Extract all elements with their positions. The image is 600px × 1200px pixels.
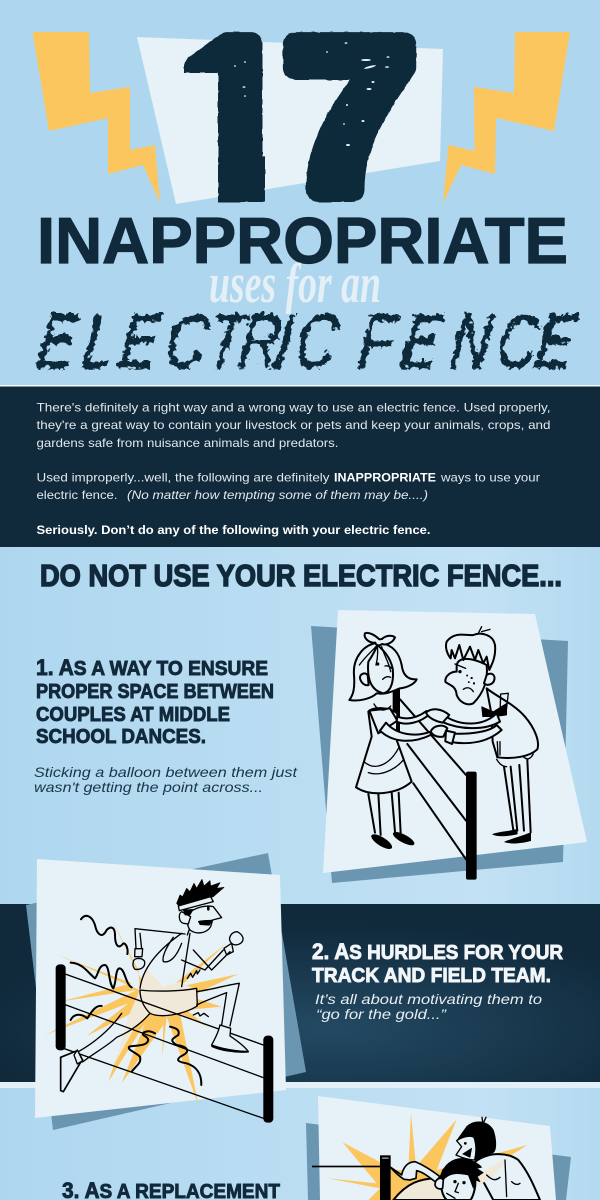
runner torso and shorts <box>140 933 230 988</box>
item 1 caption <box>34 764 298 795</box>
panel card <box>318 1096 556 1200</box>
title number 17: 1 <box>181 0 287 235</box>
intro paragraph one: they're a great way to contain your livestock or pets and keep your animals, crops, and <box>36 418 550 432</box>
posts <box>56 964 66 1050</box>
item 2 illustration panel <box>26 853 306 1130</box>
item 1 heading: COUPLES AT MIDDLE <box>36 703 230 726</box>
item 2 heading <box>312 939 563 987</box>
item 1 text <box>34 655 298 795</box>
cream highlight <box>115 968 197 1063</box>
item 1 heading: PROPER SPACE BETWEEN <box>36 680 274 703</box>
header: title artwork <box>32 32 580 370</box>
item 1 heading: SCHOOL DANCES. <box>36 725 206 748</box>
intro paragraph two: INAPPROPRIATE <box>334 470 436 484</box>
post <box>380 1155 391 1200</box>
intro paragraph two: (No matter how tempting some of them may be....) <box>127 488 428 502</box>
item 2 caption: It’s all about motivating them to <box>315 991 542 1007</box>
illustration: couple kept apart by fence <box>349 627 538 880</box>
icon: left lightning bolt <box>32 32 160 203</box>
intro paragraph one <box>36 400 550 450</box>
boy <box>426 627 538 843</box>
panel shadow <box>26 853 306 1130</box>
white backing panel <box>137 37 443 204</box>
intro warning: Seriously. Don’t do any of the following with your electric fence. <box>36 523 430 537</box>
back figure <box>456 1117 540 1200</box>
title script: uses for an: uses for an <box>209 253 381 315</box>
icon: right lightning bolt <box>443 32 570 203</box>
title word: inappropriate: INAPPROPRIATE <box>37 204 568 277</box>
boy arms <box>442 713 500 728</box>
intro band <box>0 385 600 547</box>
shock squiggles <box>81 916 128 954</box>
intro paragraph two <box>36 470 540 502</box>
intro paragraph two: electric fence. <box>36 488 118 502</box>
intro paragraph one: gardens safe from nuisance animals and predators. <box>36 436 338 450</box>
item 2 caption <box>315 991 542 1022</box>
fence post <box>466 772 477 880</box>
panel shadow <box>311 626 568 883</box>
wires <box>63 973 263 1118</box>
panel card <box>35 859 286 1118</box>
intro paragraph two: ways to use your <box>440 470 540 484</box>
title number 17 <box>184 32 417 202</box>
item 1 caption: wasn't getting the point across... <box>34 779 263 795</box>
panel shadow <box>306 1123 571 1200</box>
electric starburst <box>328 1113 527 1200</box>
runner head <box>187 906 222 933</box>
front man <box>391 1158 483 1200</box>
intro paragraph two: Used improperly...well, the following are definitely <box>36 470 330 484</box>
item 2 heading: 2. AS HURDLES FOR YOUR <box>312 939 563 964</box>
runner back arm <box>135 929 185 957</box>
item 1 caption: Sticking a balloon between them just <box>34 764 298 780</box>
illustration: man and fence <box>312 1113 540 1200</box>
panel card <box>323 610 587 873</box>
fence wires <box>400 699 466 859</box>
item 1 heading: 1. AS A WAY TO ENSURE <box>36 655 268 680</box>
cream ray <box>477 1156 510 1187</box>
girl <box>349 633 431 852</box>
girl arms <box>380 723 431 741</box>
item 2 caption: “go for the gold...” <box>316 1006 448 1022</box>
item 2 text <box>312 939 563 1022</box>
item 2 band <box>0 904 600 1088</box>
title number 17: 7 <box>286 0 413 235</box>
title jagged: electric fence: ELECTRIC FENCE <box>31 298 579 382</box>
item 3 illustration panel <box>306 1096 571 1200</box>
item 1 illustration panel <box>311 610 587 883</box>
electric starburst <box>45 917 238 1105</box>
wire <box>312 1166 380 1167</box>
item 1 heading <box>36 655 274 748</box>
item 2 heading: TRACK AND FIELD TEAM. <box>312 964 551 987</box>
number speckles <box>234 42 390 146</box>
illustration: runner zapped on hurdles <box>45 879 273 1123</box>
intro paragraph one: There's definitely a right way and a wrong way to use an electric fence. Used properly, <box>36 400 550 414</box>
runner <box>61 879 248 1092</box>
hands <box>426 709 449 723</box>
